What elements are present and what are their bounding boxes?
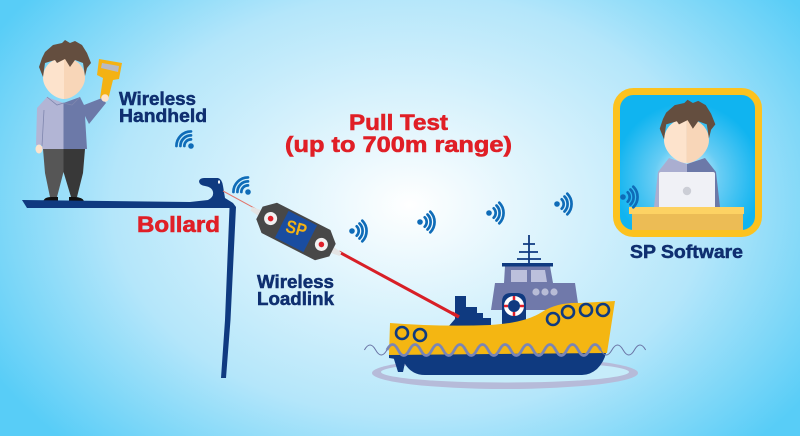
icon: wifi near bollard: [230, 174, 257, 201]
device body: [252, 198, 340, 265]
thin wave line: [364, 345, 646, 355]
red pull line: [339, 252, 459, 317]
rudder: [393, 356, 406, 372]
portholes: [396, 304, 609, 341]
wheelhouse: [491, 263, 579, 326]
label: Bollard: Bollard: [137, 212, 220, 237]
water ripple ellipse: [372, 357, 638, 389]
title: Pull Test: Pull Test: [349, 110, 449, 135]
mast: [517, 235, 541, 265]
bollard and quay: [22, 178, 236, 378]
eyelets: [262, 210, 330, 253]
trousers: [43, 149, 85, 197]
ship: [364, 235, 646, 375]
head: [660, 100, 715, 163]
label: Wireless Handheld: Handheld: [119, 106, 207, 126]
navy lower hull: [389, 353, 606, 375]
icon: yellow handheld device: [97, 59, 122, 102]
shoes: [43, 197, 84, 202]
thin line from bollard to loadlink: [223, 191, 256, 209]
laptop: [659, 172, 715, 207]
title: Pull Test: (up to 700m range): [285, 132, 512, 157]
title: Pull Test: [285, 110, 512, 157]
icons: wifi signals along pull test: [349, 194, 572, 241]
SP logo: SP: [284, 216, 309, 241]
icon: wifi near handheld: [173, 128, 200, 155]
white eyelet tabs: [249, 204, 343, 259]
life ring: [504, 296, 524, 316]
label: Wireless Loadlink: Loadlink: [257, 289, 335, 309]
navy deck cargo steps: [448, 296, 491, 327]
red line attachment: [452, 313, 459, 317]
label: Wireless Loadlink: [257, 272, 335, 309]
blue centre panel: [275, 211, 317, 252]
shirt: [654, 158, 720, 207]
thick wave line: [387, 344, 601, 356]
person: wireless handheld operator: [36, 40, 122, 202]
label: Wireless Handheld: Wireless: [119, 89, 196, 109]
shirt: [36, 97, 106, 149]
icon: wifi in panel: [620, 187, 638, 207]
label: SP Software: SP Software: [630, 242, 743, 262]
label: Wireless Handheld: [119, 89, 207, 126]
wireless loadlink device: [244, 194, 348, 269]
panel background and frame: [616, 92, 758, 234]
panel: SP software: [616, 92, 758, 234]
left hand: [36, 144, 42, 154]
desk: [629, 207, 744, 230]
yellow upper hull: [389, 301, 615, 355]
label: Wireless Loadlink: Wireless: [257, 272, 334, 292]
head: [39, 40, 91, 99]
